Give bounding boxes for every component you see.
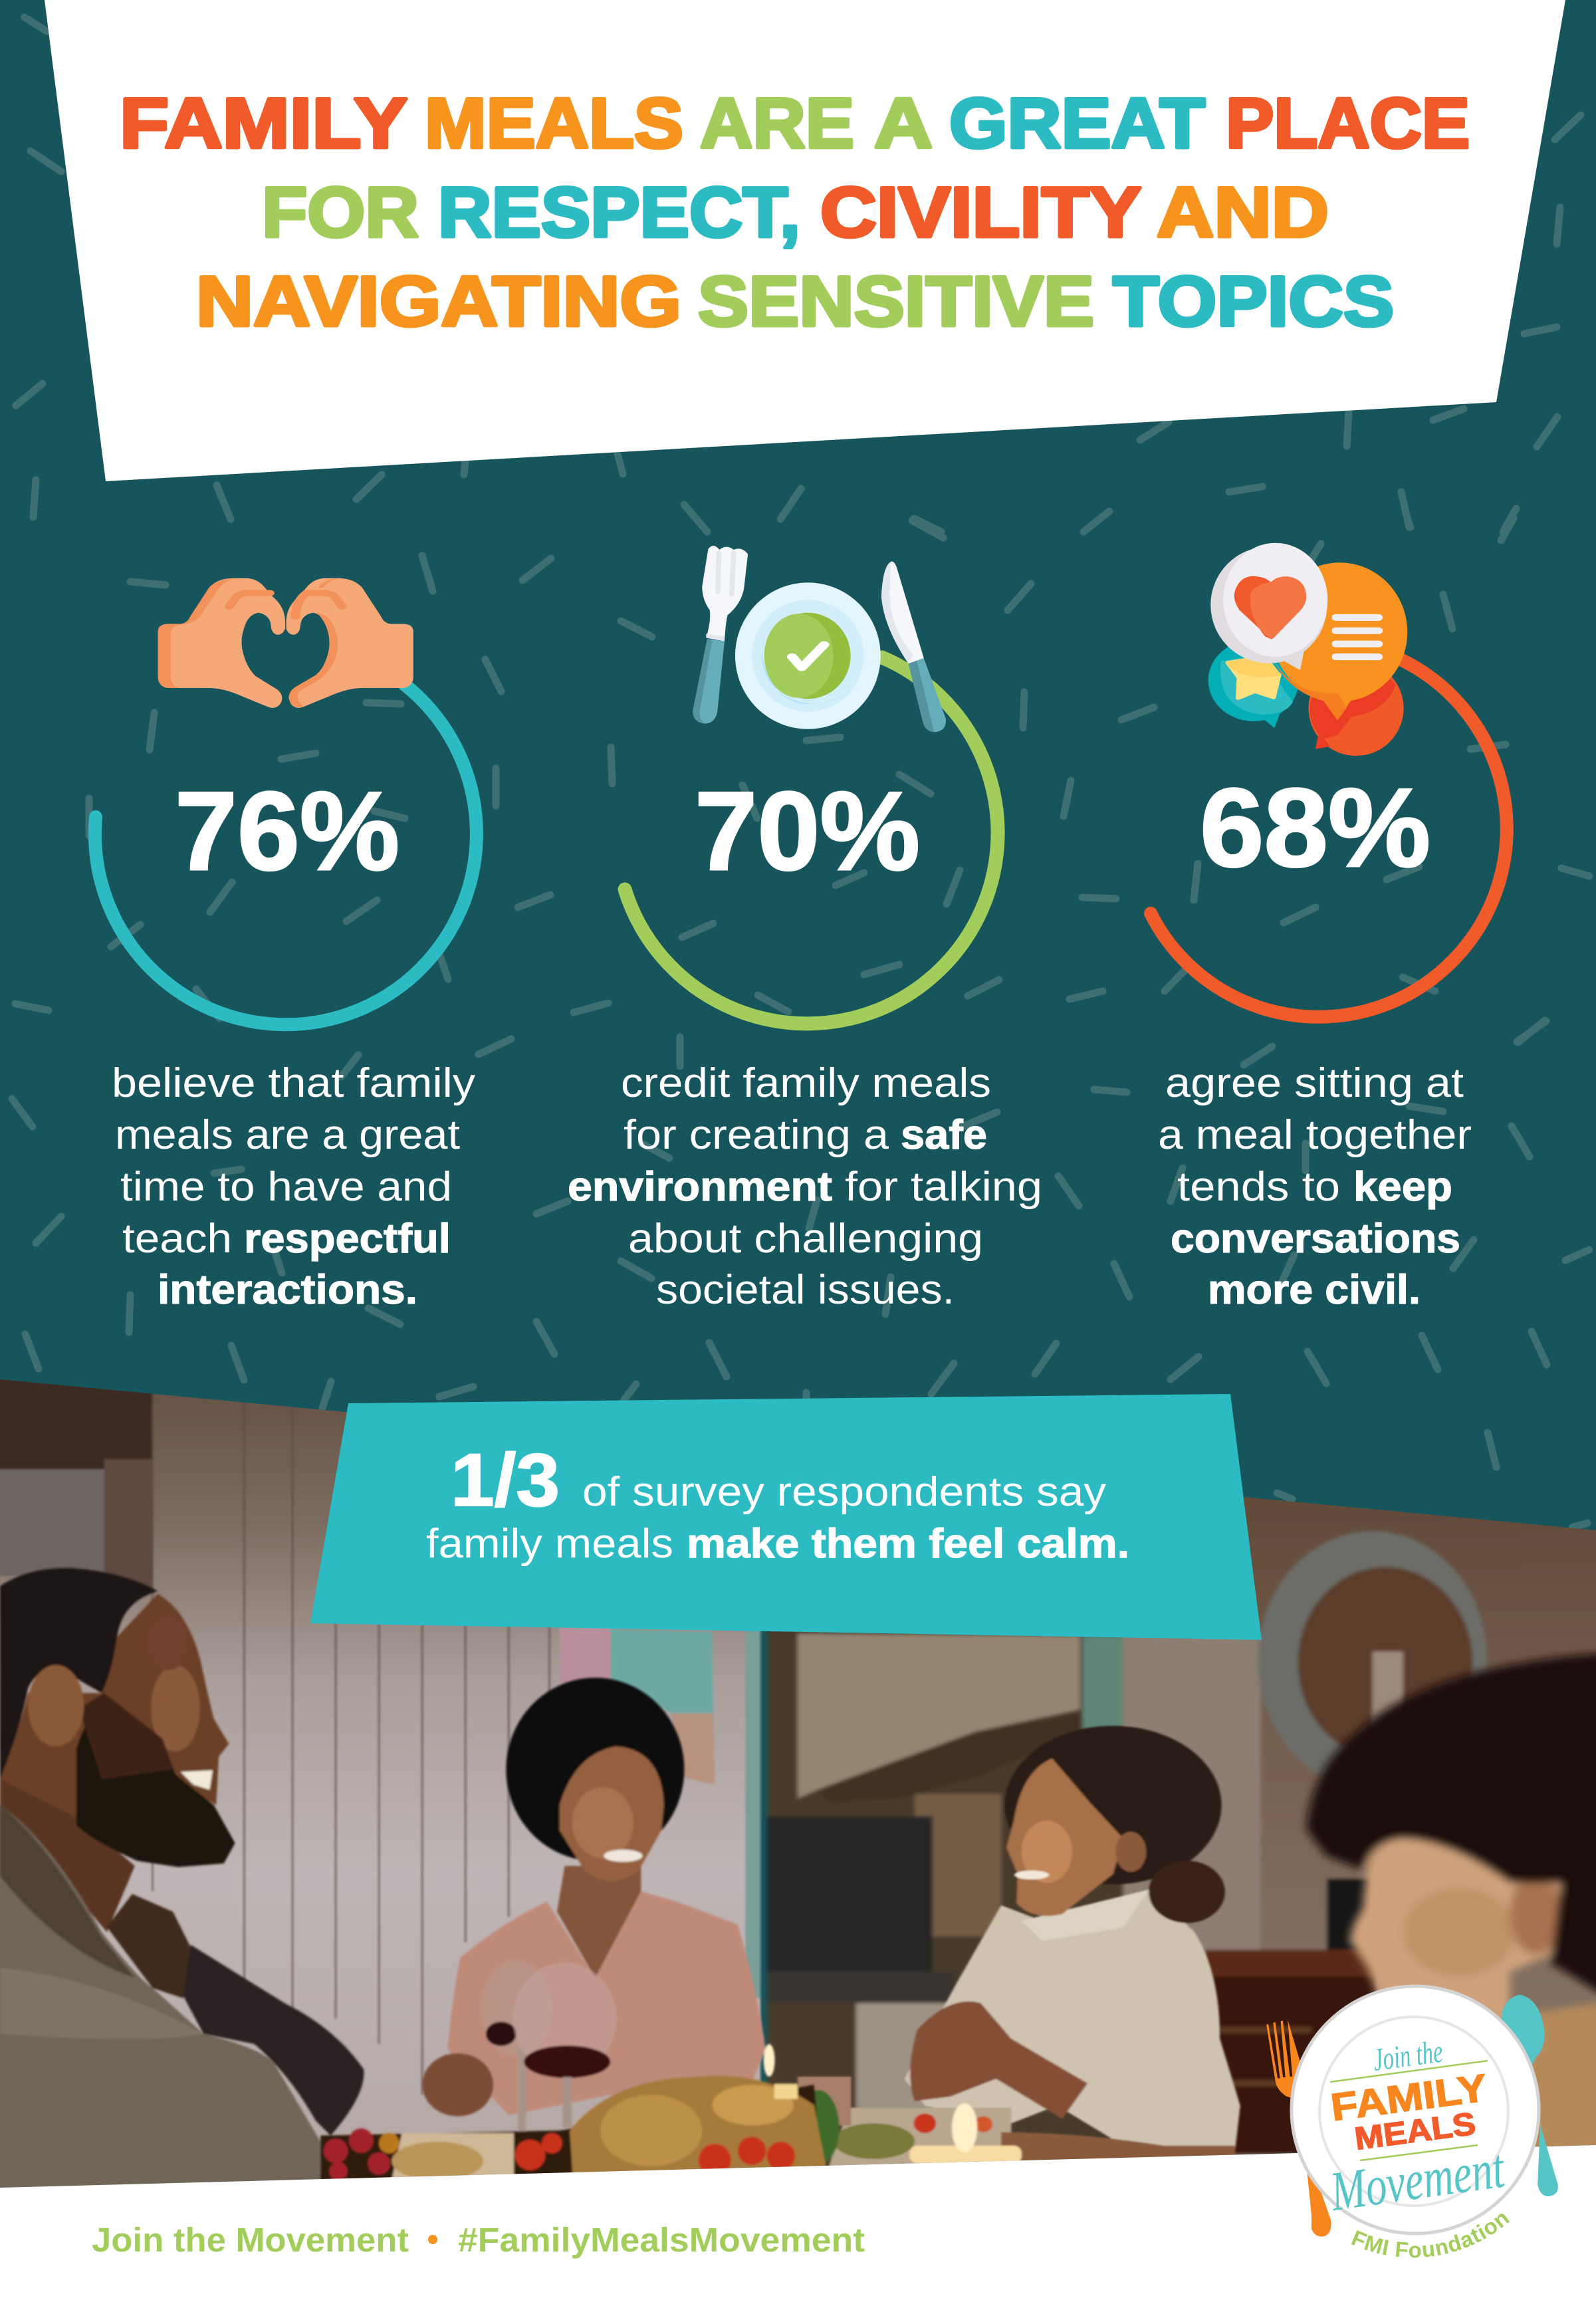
footer text [92, 2221, 865, 2259]
text: 68% description: tends to [1177, 1164, 1340, 1210]
text: 68% description: more civil. [1208, 1267, 1421, 1313]
stat value: 68%: 68% [1200, 765, 1430, 890]
title: ARE [700, 83, 854, 163]
logo: Family Meals Movement plate [1266, 1985, 1558, 2257]
header panel [45, 0, 1565, 481]
boy in foreground [1306, 1651, 1596, 2204]
title: GREAT [949, 83, 1205, 163]
girl at table [796, 1726, 1240, 2168]
title: PLACE [1226, 83, 1470, 163]
text: 76% description: believe that family [112, 1060, 475, 1106]
photo background: plank wall [0, 1352, 760, 2217]
callout banner: make them feel calm. [687, 1521, 1129, 1567]
title: FAMILY [120, 83, 407, 163]
stat value: 70%: 70% [695, 768, 920, 893]
title: RESPECT, [438, 172, 800, 252]
text: 76% description: meals are a great [115, 1112, 460, 1158]
footer text: #FamilyMealsMovement [458, 2221, 865, 2259]
text: 68% description: conversations [1171, 1216, 1460, 1262]
text: 76% description: respectful [244, 1216, 451, 1262]
logo cutlery [1266, 1995, 1558, 2237]
text: 70% description: credit family meals [621, 1060, 991, 1106]
title: TOPICS [1113, 261, 1394, 341]
text: 70% description: for talking [845, 1164, 1042, 1210]
woman [447, 1891, 766, 2115]
text: 76% description: time to have and [120, 1164, 452, 1210]
logo: Family Meals Movement plate: Join the [1371, 2034, 1444, 2078]
logo: Family Meals Movement plate: FAMILY [1328, 2066, 1490, 2129]
text: 76% description: teach [122, 1216, 232, 1262]
man [0, 1770, 135, 1932]
text: 68% description [1158, 1060, 1472, 1313]
title: AND [1157, 172, 1329, 252]
title: MEALS [425, 83, 683, 163]
text: 76% description: interactions. [158, 1267, 417, 1313]
callout banner: of survey respondents say [582, 1469, 1106, 1515]
stat value: 76%: 76% [175, 768, 399, 893]
title [120, 83, 1470, 341]
title: SENSITIVE [698, 261, 1094, 341]
title: CIVILITY [820, 172, 1141, 252]
text: 68% description: keep [1353, 1164, 1452, 1210]
logo: Family Meals Movement plate: Movement [1326, 2137, 1509, 2223]
icon: speech bubbles [1208, 543, 1407, 756]
icon: knife [881, 562, 946, 732]
logo: Family Meals Movement plate: MEALS [1353, 2106, 1478, 2157]
man, woman and food [0, 1568, 834, 2207]
wine glasses [481, 1961, 537, 2057]
title: FOR [262, 172, 419, 252]
text: 70% description: environment [568, 1164, 832, 1210]
footer white band [0, 2145, 1596, 2308]
callout banner: family meals [426, 1521, 673, 1567]
text: 70% description: for creating a [624, 1112, 889, 1158]
table food [319, 2083, 818, 2179]
text: 76% description [112, 1060, 475, 1313]
stat ring: 70% [625, 657, 998, 1024]
text: 68% description: a meal together [1158, 1112, 1472, 1158]
text: 70% description: societal issues. [656, 1267, 955, 1313]
text: 70% description [568, 1060, 1042, 1313]
text: 68% description: agree sitting at [1165, 1060, 1464, 1106]
text: 70% description: about challenging [628, 1216, 983, 1262]
text: 70% description: safe [901, 1112, 987, 1158]
title: NAVIGATING [196, 261, 681, 341]
icon: heart hands [158, 578, 413, 708]
family dinner photo [0, 1352, 1596, 2217]
logo: Family Meals Movement plate: FMI Foundation [1351, 2214, 1510, 2257]
stat ring: 68% [1151, 659, 1507, 1017]
callout banner [310, 1394, 1262, 1640]
footer text: Join the Movement [92, 2221, 409, 2259]
title: A [874, 83, 933, 163]
photo background: kitchen and right wall [765, 1497, 1596, 2166]
callout banner: 1/3 [451, 1439, 560, 1522]
stat ring: 76% [95, 685, 477, 1024]
icon: plate and fork [693, 546, 881, 729]
